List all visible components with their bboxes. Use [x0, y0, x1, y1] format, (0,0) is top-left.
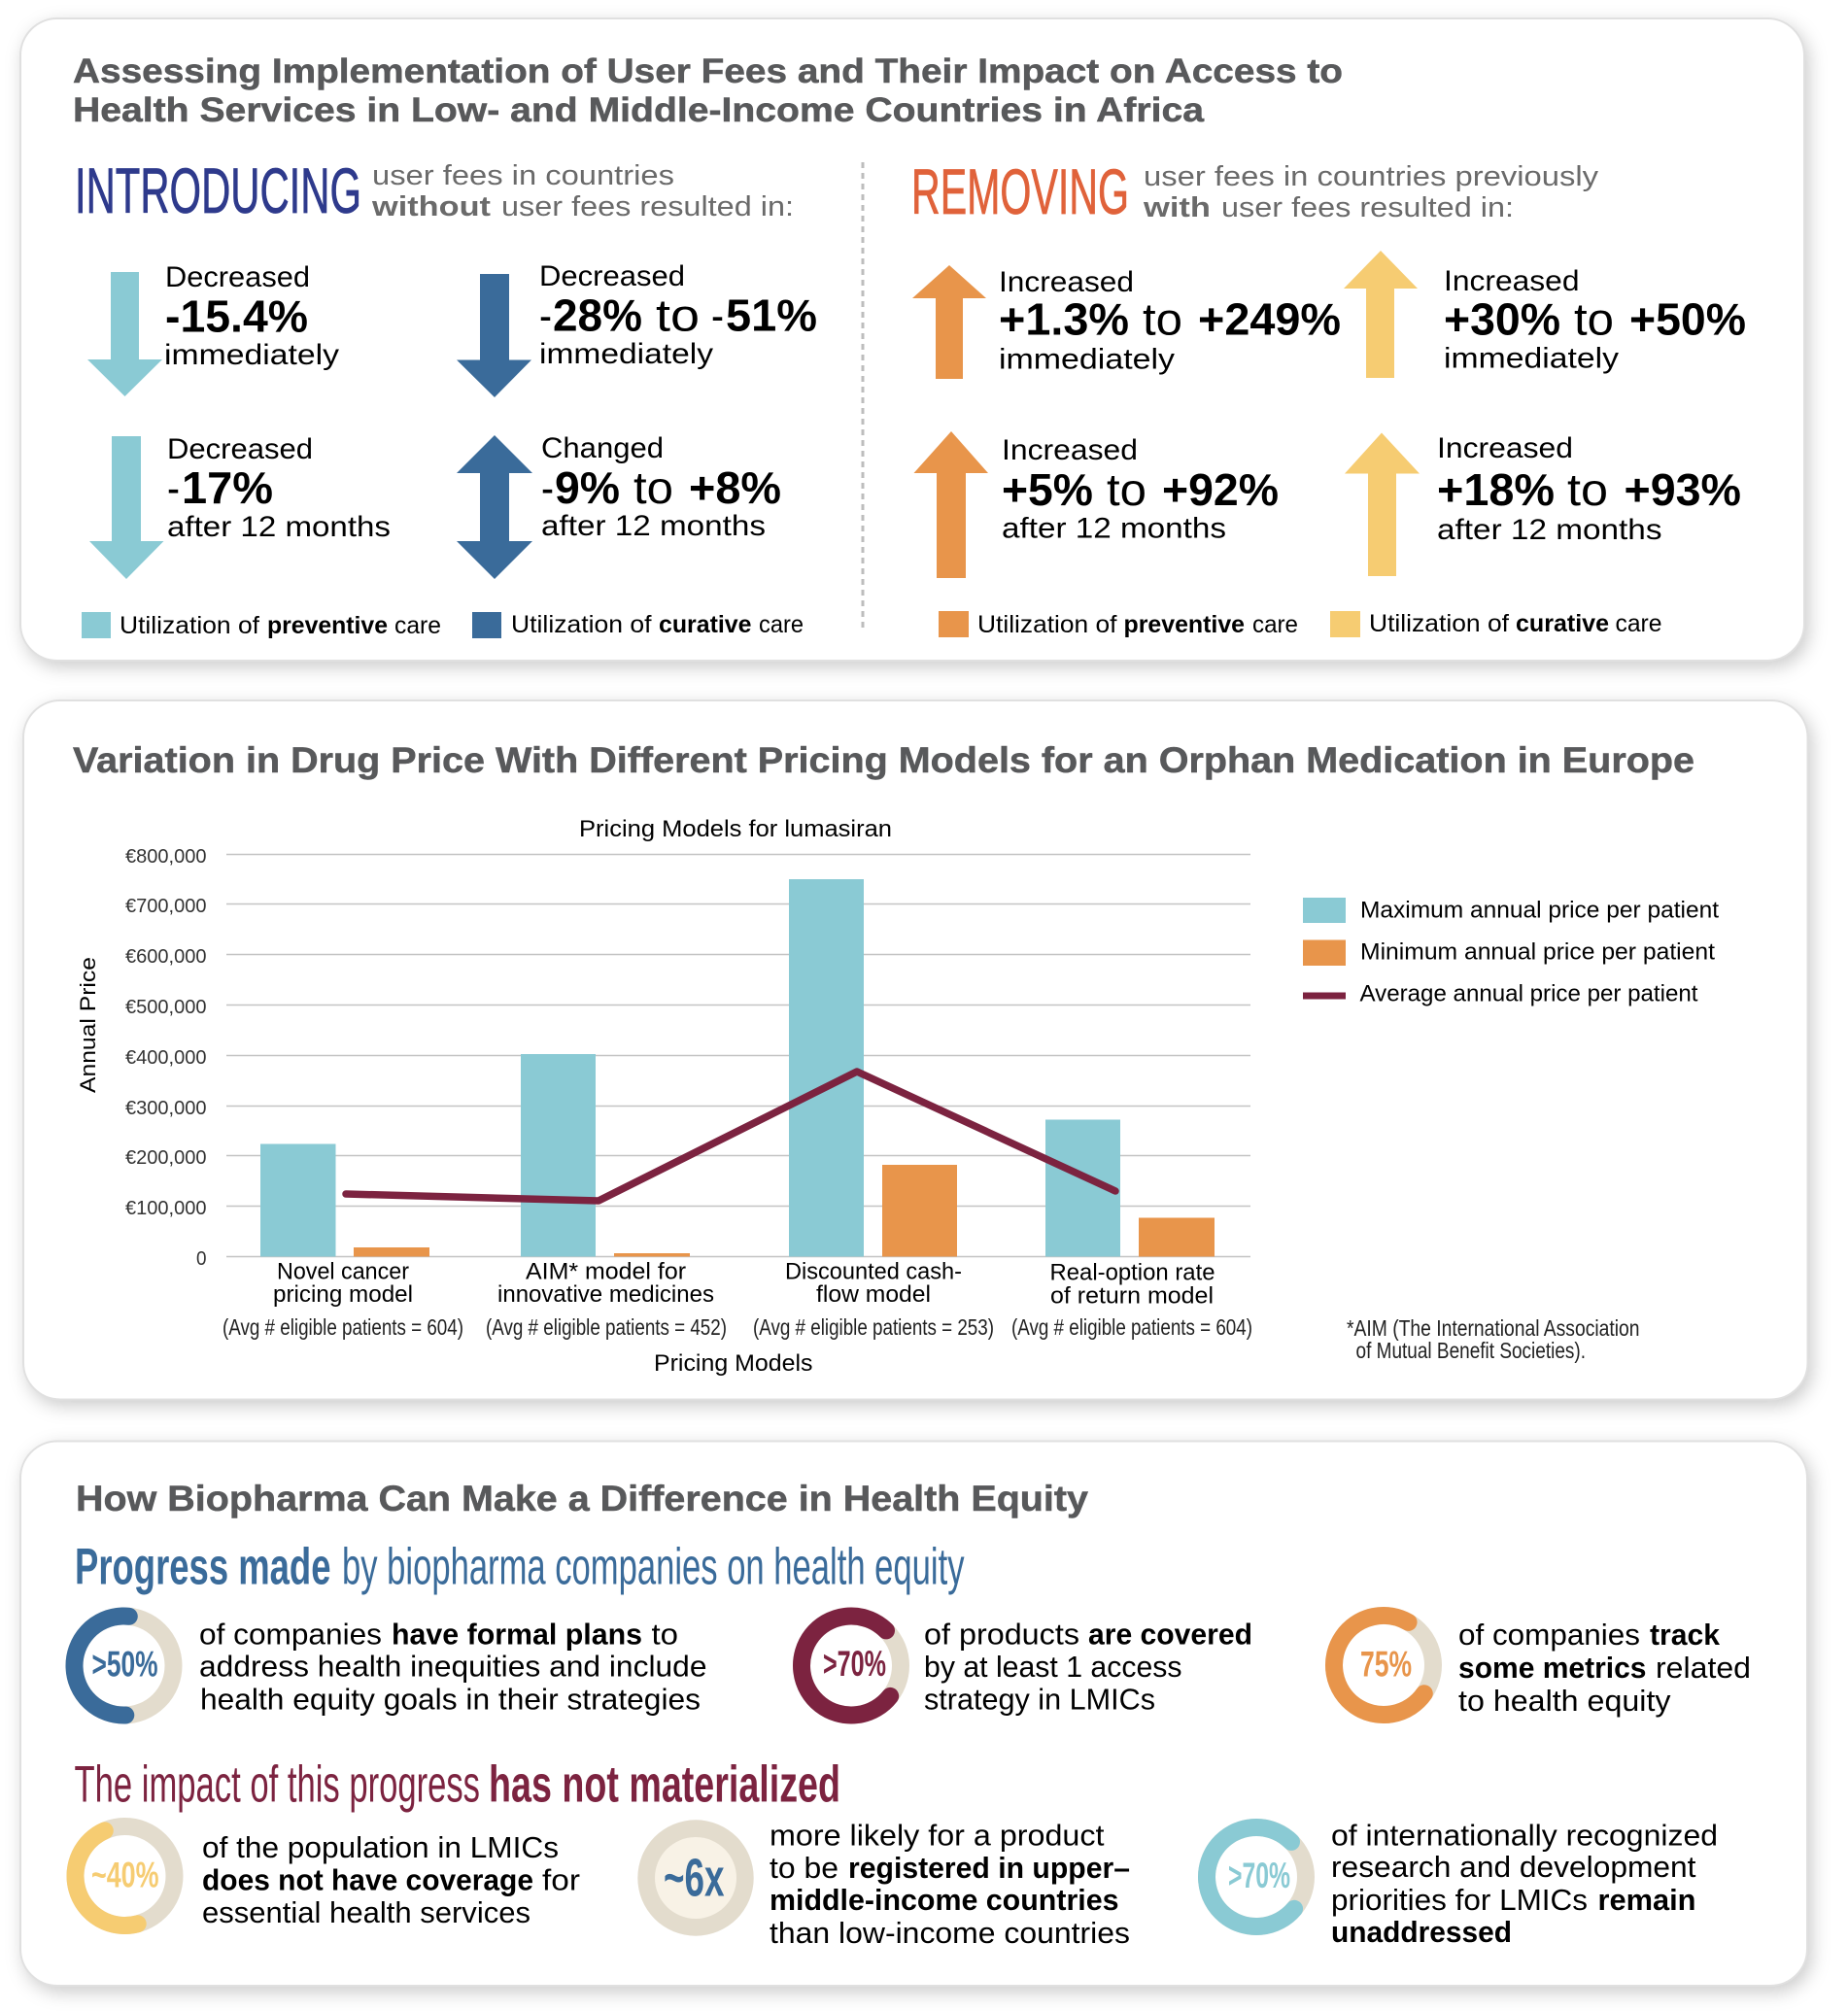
x axis title: Pricing Models — [654, 1350, 812, 1377]
donut: about 40 percent no coverage: ~40% — [91, 1856, 159, 1894]
y axis labels: €600,000 — [125, 946, 206, 968]
title: user fees: Assessing Implementation of User Fees and Their Impact on Access to — [73, 52, 1343, 90]
stat: removing curative 12 months: Increased — [1437, 432, 1573, 464]
stat: removing curative immediately: +30% — [1444, 293, 1560, 344]
icon: down arrow curative immediately — [457, 274, 531, 397]
icon: down arrow preventive immediately — [87, 272, 162, 396]
bars: maximum price — [260, 879, 1120, 1257]
heading: removing — [911, 155, 1599, 227]
text: track metrics: related — [1656, 1652, 1751, 1685]
donut: over 50 percent formal plans — [73, 1615, 175, 1717]
footnote: of Mutual Benefit Societies). — [1356, 1338, 1586, 1363]
x axis patient counts: (Avg # eligible patients = 452) — [486, 1314, 727, 1340]
donut: over 50 percent formal plans: >50% — [91, 1644, 157, 1685]
icon: up arrow preventive immediately — [912, 265, 986, 379]
stat: preventive immediately: -15.4% — [165, 291, 308, 342]
y axis labels: €800,000 — [125, 846, 206, 868]
bars: minimum price — [354, 1165, 1215, 1257]
icon: double arrow curative 12 months — [457, 435, 532, 579]
heading: introducing: without — [371, 191, 491, 222]
stat: curative immediately: - — [711, 290, 724, 340]
heading: progress made — [75, 1539, 965, 1595]
heading: introducing: user fees in countries — [372, 160, 674, 191]
text: priorities unaddressed: of internationally recognized — [1331, 1819, 1718, 1852]
text: track metrics: to health equity — [1458, 1685, 1671, 1718]
x axis patient counts: (Avg # eligible patients = 604) — [222, 1314, 463, 1340]
text: products covered: strategy in LMICs — [924, 1683, 1155, 1716]
stat: preventive 12 months: 17% — [182, 462, 273, 513]
stat: curative 12 months: 9% — [555, 462, 620, 513]
text: products covered: are covered — [1088, 1619, 1252, 1652]
stat: removing preventive 12 months: +5% — [1002, 464, 1093, 515]
heading: introducing — [75, 154, 794, 226]
text: formal plans: of companies — [199, 1619, 382, 1652]
stat: curative immediately: 51% — [726, 290, 817, 340]
legend: introducing: care — [759, 611, 804, 638]
heading: impact not materialized: The impact of this progress — [74, 1756, 480, 1813]
x axis category labels: flow model — [816, 1281, 931, 1308]
stat: preventive 12 months — [167, 433, 391, 543]
stat: removing preventive 12 months: +92% — [1162, 464, 1279, 515]
stat: preventive 12 months: Decreased — [167, 433, 313, 465]
text: track metrics: of companies — [1458, 1619, 1640, 1652]
text: formal plans: health equity goals in their strategies — [200, 1683, 701, 1716]
panel: drug pricing — [23, 700, 1807, 1399]
y axis labels: €500,000 — [125, 997, 206, 1018]
stat: curative 12 months: Changed — [541, 432, 664, 464]
text: registered in upper-middle-income: registered in upper– — [848, 1852, 1130, 1885]
title: user fees: Health Services in Low- and Middle-Income Countries in Africa — [73, 91, 1205, 129]
footnote — [1347, 1315, 1640, 1363]
x axis patient counts — [222, 1314, 1252, 1340]
text: track metrics: track — [1650, 1619, 1720, 1652]
y axis labels: €300,000 — [125, 1098, 206, 1119]
text: products covered: by at least 1 access — [924, 1651, 1181, 1684]
text: products covered — [924, 1619, 1252, 1716]
stat: removing curative immediately: immediately — [1444, 342, 1619, 375]
x axis category labels: Real-option rate — [1049, 1259, 1215, 1286]
text: formal plans: have formal plans — [392, 1619, 642, 1652]
text: products covered: of products — [924, 1619, 1079, 1652]
stat: removing preventive immediately: +249% — [1198, 293, 1341, 344]
legend: removing — [939, 610, 1661, 638]
legend: introducing — [82, 611, 804, 639]
stat: removing preventive 12 months: to — [1107, 464, 1146, 515]
legend: removing: preventive — [1123, 611, 1245, 638]
x axis category labels: of return model — [1050, 1282, 1214, 1310]
x axis patient counts: (Avg # eligible patients = 253) — [753, 1314, 994, 1340]
heading: progress made: by biopharma companies on health equity — [342, 1539, 965, 1595]
stat: removing curative 12 months: to — [1567, 464, 1608, 515]
x axis patient counts: (Avg # eligible patients = 604) — [1011, 1314, 1252, 1340]
stat: removing curative 12 months: after 12 months — [1437, 514, 1661, 546]
panel card: user fees — [20, 18, 1804, 661]
legend: introducing: care — [394, 612, 441, 639]
donut: about 6x more likely: ~6x — [664, 1848, 725, 1908]
stat: removing preventive 12 months: Increased — [1002, 434, 1138, 466]
legend: introducing: Utilization of — [120, 612, 259, 639]
chart legend: Average annual price per patient — [1360, 981, 1698, 1006]
title: health equity: How Biopharma Can Make a Difference in Health Equity — [76, 1479, 1088, 1518]
text: registered in upper-middle-income: more likely for a product — [770, 1819, 1105, 1852]
stat: removing preventive immediately: Increased — [999, 266, 1134, 298]
y axis labels: €700,000 — [125, 896, 206, 917]
stat: removing curative 12 months: +93% — [1625, 464, 1741, 515]
stat: curative 12 months: after 12 months — [541, 510, 766, 542]
text: track metrics — [1458, 1619, 1751, 1718]
donut: 75 percent track metrics — [1315, 1596, 1453, 1734]
y axis labels: €200,000 — [125, 1147, 206, 1169]
heading: removing: user fees resulted in: — [1221, 192, 1514, 223]
text: priorities unaddressed: priorities for LMICs — [1331, 1884, 1588, 1917]
text: registered in upper-middle-income — [770, 1819, 1130, 1950]
x axis category labels: Discounted cash- — [785, 1259, 962, 1284]
stat: preventive 12 months: - — [167, 462, 180, 513]
line: average price — [346, 1072, 1115, 1201]
y axis title: Annual Price — [76, 957, 100, 1093]
text: registered in upper-middle-income: middle-income countries — [770, 1884, 1119, 1917]
chart legend: Minimum annual price per patient — [1360, 938, 1715, 966]
legend: removing: care — [1615, 610, 1661, 637]
legend: removing: Utilization of — [1369, 610, 1509, 637]
stat: removing curative 12 months — [1437, 432, 1741, 546]
text: track metrics: some metrics — [1458, 1652, 1646, 1685]
text: formal plans: address health inequities and include — [199, 1650, 707, 1683]
stat: removing curative 12 months: +18% — [1437, 464, 1555, 515]
icon: up arrow curative immediately — [1344, 251, 1418, 378]
stat: removing preventive immediately: immediately — [999, 344, 1175, 375]
legend: removing: care — [1252, 611, 1298, 638]
heading: removing: user fees in countries previously — [1144, 161, 1599, 192]
chart legend: Maximum annual price per patient — [1360, 898, 1719, 923]
heading: introducing: INTRODUCING — [75, 154, 361, 226]
stat: curative 12 months: +8% — [689, 462, 781, 513]
bar chart: pricing models — [76, 846, 1252, 1377]
heading: removing: with — [1143, 192, 1211, 223]
legend: introducing: Utilization of — [511, 611, 652, 638]
stat: curative immediately: 28% — [553, 290, 642, 340]
text: no coverage: does not have coverage — [202, 1863, 533, 1896]
heading: introducing: user fees resulted in: — [501, 191, 794, 222]
stat: preventive immediately — [164, 261, 339, 371]
stat: removing curative immediately — [1444, 265, 1746, 375]
panel card: drug pricing — [23, 700, 1807, 1399]
stat: preventive immediately: Decreased — [165, 261, 310, 293]
text: no coverage: essential health services — [202, 1896, 530, 1929]
y axis labels: 0 — [196, 1248, 206, 1270]
x axis category labels: pricing model — [273, 1281, 413, 1308]
donut: about 6x more likely — [637, 1820, 754, 1936]
text: priorities unaddressed: research and development — [1331, 1851, 1696, 1884]
stat: curative immediately — [539, 260, 817, 370]
title: user fees — [73, 52, 1343, 129]
stat: curative immediately: to — [656, 290, 700, 340]
legend: removing: curative — [1516, 610, 1609, 637]
donut: over 70 percent priorities unaddressed: >70% — [1228, 1856, 1290, 1895]
stat: removing curative immediately: Increased — [1444, 265, 1580, 297]
x axis category labels — [273, 1259, 1215, 1310]
stat: curative immediately: - — [539, 290, 552, 340]
legend: introducing: curative — [659, 611, 752, 638]
donut: over 70 percent products covered: >70% — [823, 1644, 886, 1684]
footnote: *AIM (The International Association — [1347, 1315, 1640, 1341]
text: priorities unaddressed — [1331, 1819, 1718, 1949]
y axis labels: €400,000 — [125, 1047, 206, 1069]
icon: up arrow preventive 12 months — [913, 431, 988, 578]
stat: preventive immediately: immediately — [164, 339, 339, 371]
stat: curative 12 months: - — [541, 462, 554, 513]
text: no coverage: of the population in LMICs — [202, 1831, 559, 1864]
y axis labels — [125, 846, 206, 1270]
stat: removing curative immediately: +50% — [1629, 293, 1746, 344]
donut: over 70 percent priorities unaddressed — [1186, 1807, 1326, 1947]
text: no coverage — [202, 1831, 580, 1929]
panel: health equity — [20, 1442, 1807, 1986]
panel: user fees — [20, 18, 1804, 661]
stat: removing preventive immediately: +1.3% — [999, 293, 1129, 344]
stat: removing preventive 12 months — [1002, 434, 1279, 544]
text: no coverage: for — [542, 1863, 580, 1896]
icon: up arrow curative 12 months — [1345, 433, 1420, 576]
text: formal plans — [199, 1619, 707, 1716]
heading: progress made: Progress made — [75, 1539, 330, 1595]
text: registered in upper-middle-income: than low-income countries — [770, 1917, 1130, 1950]
stat: removing preventive immediately — [999, 266, 1341, 375]
x axis category labels: AIM* model for — [526, 1259, 686, 1284]
heading: impact not materialized: has not materialized — [489, 1756, 840, 1813]
y axis labels: €100,000 — [125, 1198, 206, 1219]
stat: curative 12 months — [541, 432, 781, 542]
stat: curative immediately: Decreased — [539, 260, 685, 292]
stat: curative 12 months: to — [633, 462, 673, 513]
stat: preventive 12 months: after 12 months — [167, 511, 391, 543]
donut: over 70 percent products covered — [781, 1596, 921, 1735]
text: formal plans: to — [651, 1619, 678, 1652]
stat: removing preventive 12 months: after 12 months — [1002, 513, 1226, 544]
chart legend — [1303, 898, 1719, 1006]
panel card: health equity — [20, 1442, 1807, 1986]
donut: 75 percent track metrics: 75% — [1360, 1644, 1412, 1685]
stat: curative immediately: immediately — [539, 338, 713, 370]
stat: removing preventive immediately: to — [1143, 293, 1182, 344]
text: priorities unaddressed: unaddressed — [1331, 1916, 1512, 1949]
x axis category labels: Novel cancer — [277, 1259, 409, 1284]
x axis category labels: innovative medicines — [497, 1281, 714, 1308]
icon: down arrow preventive 12 months — [89, 436, 163, 579]
stat: removing curative immediately: to — [1574, 293, 1614, 344]
chart title: Pricing Models for lumasiran — [579, 816, 892, 842]
heading: removing: REMOVING — [911, 155, 1129, 227]
text: registered in upper-middle-income: to be — [770, 1852, 838, 1885]
legend: introducing: preventive — [267, 612, 388, 639]
donut: about 40 percent no coverage — [64, 1816, 186, 1936]
text: priorities unaddressed: remain — [1597, 1884, 1696, 1917]
title: drug pricing: Variation in Drug Price With Different Pricing Models for an Orphan Medication in Europe — [73, 740, 1694, 780]
legend: removing: Utilization of — [977, 611, 1117, 638]
